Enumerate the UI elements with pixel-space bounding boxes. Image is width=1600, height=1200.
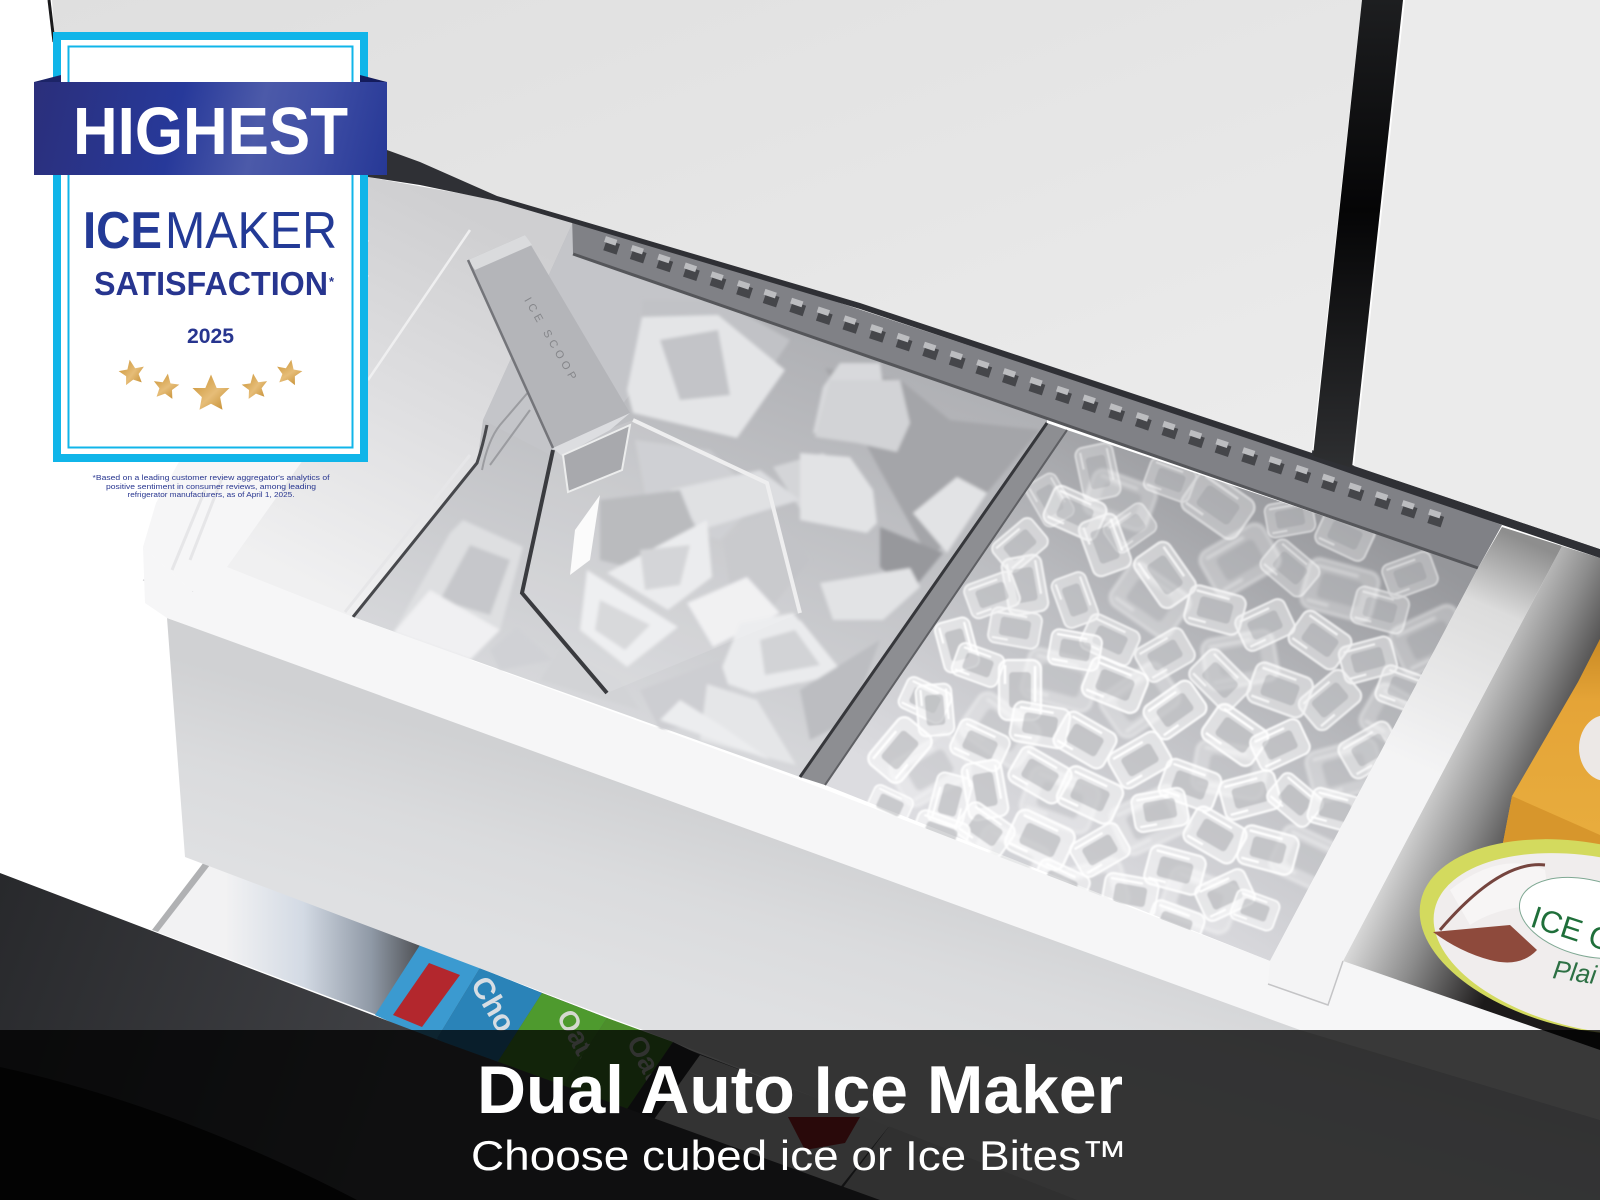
right door	[1354, 0, 1600, 549]
icemaker heading	[83, 202, 337, 260]
footnote	[92, 473, 331, 499]
caption subtitle: Choose cubed ice or Ice Bites™	[471, 1132, 1127, 1179]
footnote: positive sentiment in consumer reviews, among leading	[106, 482, 316, 491]
drawer interior wall	[143, 177, 620, 620]
black center divider	[1313, 0, 1403, 468]
ribbon: HIGHEST	[73, 94, 348, 169]
right compartment	[1268, 527, 1600, 1064]
freezer drawer food items: Oats	[621, 1030, 677, 1100]
left door	[52, 0, 1362, 453]
ice scoop	[468, 235, 800, 693]
satisfaction heading: SATISFACTION	[94, 266, 328, 303]
ice bin rail	[572, 215, 1502, 568]
drawer front rim	[143, 547, 1600, 1120]
ribbon	[34, 75, 387, 175]
freezer drawer food items	[152, 862, 1090, 1200]
caption title: Dual Auto Ice Maker	[477, 1052, 1123, 1128]
freezer drawer food items: Oats	[551, 1004, 607, 1074]
scoop label: ICE SCOOP	[521, 296, 580, 386]
ice bin: ice bites	[825, 430, 1478, 961]
bin divider	[800, 423, 1067, 785]
caption bar	[0, 1030, 1600, 1200]
five gold stars	[117, 357, 304, 410]
icemaker heading: MAKER	[165, 202, 337, 260]
lower black door	[0, 873, 880, 1200]
satisfaction heading: *	[329, 274, 335, 289]
badge frame	[57, 36, 364, 458]
year: 2025	[187, 325, 234, 348]
freezer drawer food items: Cho	[464, 971, 522, 1038]
orange carton	[1502, 639, 1600, 848]
award badge	[34, 36, 387, 499]
ice cream tub	[1401, 810, 1600, 1064]
ice cream tub: Plai	[1551, 954, 1599, 990]
footnote: *Based on a leading customer review aggregator's analytics of	[92, 473, 331, 482]
ice bin: cubed ice	[345, 224, 1047, 777]
drawer front panel	[167, 618, 1600, 1200]
footnote: refrigerator manufacturers, as of April 1, 2025.	[128, 490, 294, 499]
door edge left	[49, 0, 54, 42]
door shadow band	[368, 135, 1600, 558]
icemaker heading: ICE	[83, 202, 162, 260]
